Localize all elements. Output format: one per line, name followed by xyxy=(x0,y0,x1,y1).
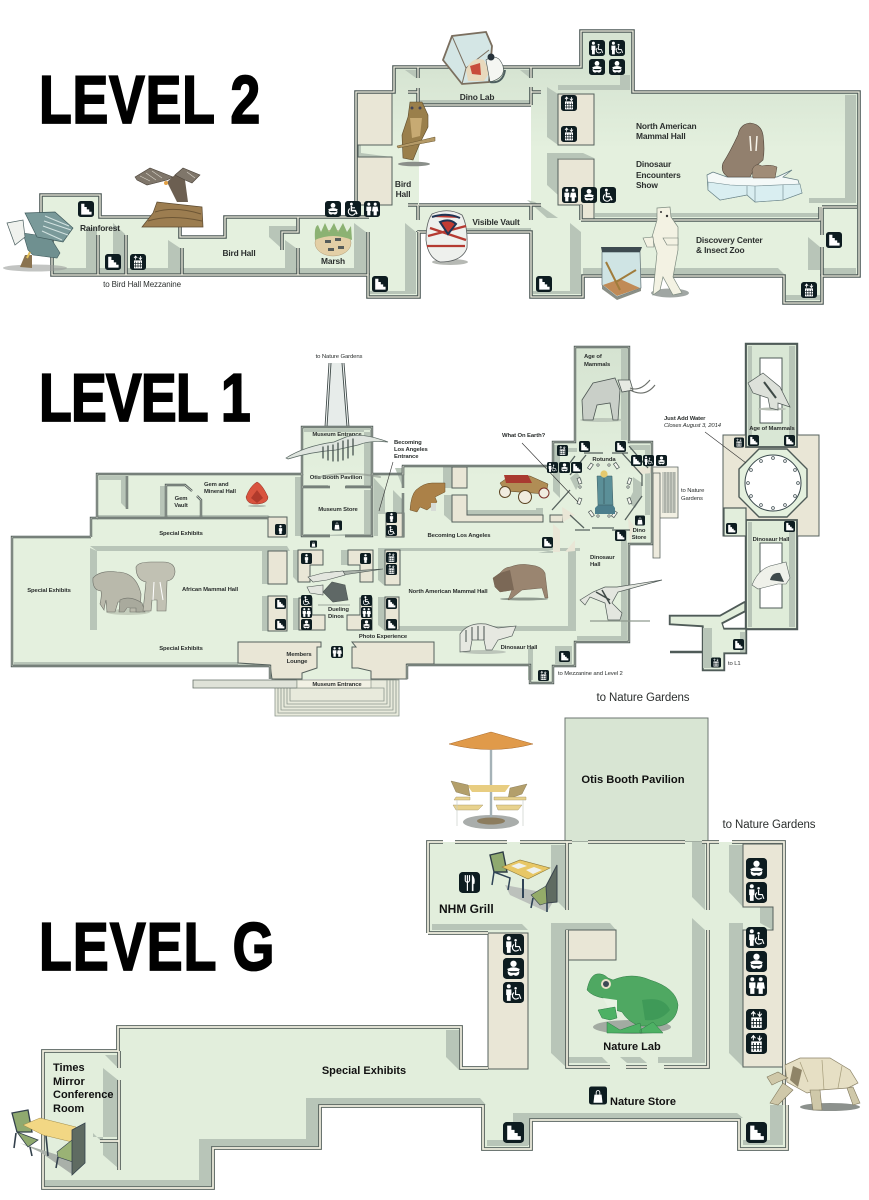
panel: Level 2 floor plan xyxy=(3,31,859,303)
atrium columns xyxy=(747,457,799,509)
illustration: owl xyxy=(397,102,435,166)
Nature Gardens stairs xyxy=(652,467,678,558)
labels: Level 1: Special Exhibits xyxy=(27,588,72,594)
labels: Level G: Nature Lab xyxy=(603,1041,661,1053)
labels: Level 2: Dinosaur xyxy=(636,159,672,169)
labels: Level 2: Marsh xyxy=(321,256,345,266)
beige surround xyxy=(723,435,819,536)
labels: Level G: Times xyxy=(53,1062,85,1074)
labels: Level G: Nature Store xyxy=(610,1096,676,1108)
labels: Level 2: Bird xyxy=(395,179,411,189)
entrance platform xyxy=(193,680,297,688)
walls: Level G xyxy=(43,842,787,1188)
labels: Level 1: Otis Booth Pavilion xyxy=(310,475,363,481)
labels: Level 1: Vault xyxy=(174,503,188,509)
icons: Level 2 xyxy=(78,40,842,298)
panel: Level G floor plan xyxy=(12,692,860,1188)
labels: Level 2: Bird Hall xyxy=(222,248,256,258)
illustration: harpy eagle xyxy=(3,212,73,272)
statue: rotunda xyxy=(595,470,615,514)
labels: Level 1: Age of xyxy=(584,354,602,360)
illustration: grill table and chairs xyxy=(490,852,557,912)
labels: Level 1: Mineral Hall xyxy=(204,489,236,495)
labels: Level 1: Hall xyxy=(590,562,601,568)
Museum Entrance strip xyxy=(297,680,371,688)
labels: Level G: Otis Booth Pavilion xyxy=(581,774,685,786)
rotunda walls xyxy=(552,446,648,530)
wall shadows: Level 2 xyxy=(52,70,856,300)
labels: Level 1: Lounge xyxy=(287,659,308,665)
labels: Level 1: Age of Mammals xyxy=(749,426,796,432)
mezzanine lower-left room xyxy=(724,508,746,536)
rooms: restroom blocks xyxy=(298,550,373,630)
illustration: bear xyxy=(410,483,445,512)
wall shadows: Level G xyxy=(45,842,783,1186)
illustration: marsh diorama xyxy=(315,223,352,256)
illustration: whale skeleton xyxy=(286,435,388,478)
illustration: conference table and chairs xyxy=(12,1110,85,1175)
floor: Level 1 xyxy=(12,347,652,683)
labels: Level 1: Becoming Los Angeles xyxy=(428,533,491,539)
upper void xyxy=(760,358,782,423)
rooms: beige areas xyxy=(268,467,563,631)
floor: Level G xyxy=(43,842,787,1188)
labels: Level G: Mirror xyxy=(53,1076,86,1088)
Otis Booth Pavilion room xyxy=(565,718,708,842)
bridge: to Nature Gardens xyxy=(325,363,349,427)
labels: Level 1: to Nature Gardens xyxy=(316,354,363,360)
octagon xyxy=(739,449,807,517)
illustration: skull xyxy=(752,562,790,589)
illustration: T. rex skeleton xyxy=(580,580,662,621)
lower void xyxy=(760,543,782,608)
void between Dino Lab and Visible Vault xyxy=(419,105,531,205)
wall highlight: Level G xyxy=(43,842,787,1188)
illustration: antique car xyxy=(500,475,549,504)
labels: Level 1: Members xyxy=(286,652,312,658)
members lounge xyxy=(238,642,434,679)
illustration: mammoth skeleton xyxy=(580,378,655,422)
labels: Level 1: North American Mammal Hall xyxy=(408,589,488,595)
labels: Level 2: North American xyxy=(636,121,696,131)
mezzanine upper hall xyxy=(746,344,797,447)
labels: Level G: Conference xyxy=(53,1089,114,1101)
rotunda wedges xyxy=(553,467,652,552)
rooms: beige service areas xyxy=(488,844,784,1069)
labels: Level 1: Dinosaur xyxy=(590,555,616,561)
labels: Level 1: Dinosaur Hall xyxy=(501,645,538,651)
wall highlight: Level 2 xyxy=(41,31,859,303)
labels: Level G: to Nature Gardens xyxy=(597,692,690,704)
title: Level 2: LEVEL 2 xyxy=(39,62,260,137)
labels: Level 1: Dinosaur Hall xyxy=(753,537,790,543)
labels: Level 1: Closes August 3, 2014 xyxy=(664,423,722,429)
leader lines xyxy=(379,432,746,511)
illustration: visible vault mask xyxy=(426,211,468,265)
labels: Level 1: Photo Experience xyxy=(359,634,408,640)
labels: Level 1: Dinos xyxy=(328,614,345,620)
atrium xyxy=(745,455,801,511)
mezzanine plan xyxy=(670,344,819,670)
entrance steps xyxy=(275,680,399,716)
labels: Level G: to Nature Gardens xyxy=(723,819,816,831)
labels: Level 1: Rotunda xyxy=(592,457,616,463)
labels: Level 1: Special Exhibits xyxy=(159,646,204,652)
labels: Level 1: Dino xyxy=(633,528,646,534)
illustration: triceratops skeleton xyxy=(460,624,516,654)
title: Level G: LEVEL G xyxy=(39,909,274,984)
illustration: gem xyxy=(246,482,268,507)
labels: Level 1 xyxy=(27,354,796,688)
icons: Level G xyxy=(459,858,767,1143)
illustration: condor on rock xyxy=(135,168,203,227)
labels: Level 1: Museum Store xyxy=(318,507,359,513)
mezzanine lower wing xyxy=(670,602,746,670)
labels: Level 2: Show xyxy=(636,180,658,190)
labels: Level G: Room xyxy=(53,1103,84,1115)
labels: Level 1: Dueling xyxy=(328,607,349,613)
illustration: patio umbrella table xyxy=(449,732,533,829)
labels: Level 1: Museum Entrance xyxy=(312,682,362,688)
labels: Level 2: Hall xyxy=(396,189,410,199)
wall shadows: Level 1 xyxy=(14,349,650,680)
labels: Level 1: Gem and xyxy=(204,482,229,488)
labels: Level 2 xyxy=(80,92,763,289)
walls: Level 1 xyxy=(12,344,797,683)
illustration: tortoise skeleton xyxy=(767,1058,860,1111)
labels: Level 2: Visible Vault xyxy=(472,217,520,227)
illustration: sloth skeleton xyxy=(748,373,790,410)
mezzanine shadows xyxy=(703,346,795,668)
title: Level 1: LEVEL 1 xyxy=(39,360,251,435)
panel: Level 1 floor plan xyxy=(12,344,819,716)
labels: Level 1: Gem xyxy=(175,496,187,502)
labels: Level 1: Museum Entrance xyxy=(312,432,362,438)
labels: Level 1: Los Angeles xyxy=(394,447,429,453)
labels: Level 2: to Bird Hall Mezzanine xyxy=(103,280,182,289)
labels: Level 1: to Nature xyxy=(681,488,705,494)
labels: Level G xyxy=(53,692,816,1115)
walls: Level 2 xyxy=(41,31,859,303)
labels: Level 1: Mammals xyxy=(584,362,611,368)
labels: Level 2: Discovery Center xyxy=(696,235,763,245)
labels: Level G: NHM Grill xyxy=(439,902,494,916)
illustration: walrus on ice xyxy=(707,123,802,202)
floor: Level 2 xyxy=(41,31,859,303)
illustration: insect display case xyxy=(601,247,642,300)
labels: Level 1: Special Exhibits xyxy=(159,531,204,537)
labels: Level 1: Store xyxy=(632,535,647,541)
illustration: dueling dinos xyxy=(307,569,383,605)
illustration: elephants xyxy=(93,562,175,615)
labels: Level 1: Just Add Water xyxy=(664,416,706,422)
illustration: frog xyxy=(587,974,678,1034)
labels: Level 2: Mammal Hall xyxy=(636,131,686,141)
labels: Level 1: to Mezzanine and Level 2 xyxy=(558,671,623,677)
wall highlight: Level 1 xyxy=(12,344,797,683)
rotunda exhibit cases xyxy=(577,462,632,518)
illustration: dino lab case xyxy=(443,32,505,84)
labels: Level G: Special Exhibits xyxy=(322,1065,406,1077)
mezzanine lower hall xyxy=(746,520,797,629)
labels: Level 2: Dino Lab xyxy=(460,92,494,102)
illustration: polar bear xyxy=(643,207,689,298)
labels: Level 1: African Mammal Hall xyxy=(182,587,238,593)
labels: Level 1: to L1 xyxy=(728,661,741,667)
rooms: beige service areas xyxy=(356,92,594,220)
labels: Level 2: Rainforest xyxy=(80,223,120,233)
labels: Level 1: Entrance xyxy=(394,454,419,460)
labels: Level 1: Gardens xyxy=(681,496,703,502)
labels: Level 1: Becoming xyxy=(394,440,422,446)
icons: Level 1 xyxy=(275,435,795,681)
labels: Level 2: & Insect Zoo xyxy=(696,245,744,255)
labels: Level 1: What On Earth? xyxy=(502,433,546,439)
labels: Level 2: Encounters xyxy=(636,170,681,180)
illustration: bison xyxy=(493,564,548,600)
